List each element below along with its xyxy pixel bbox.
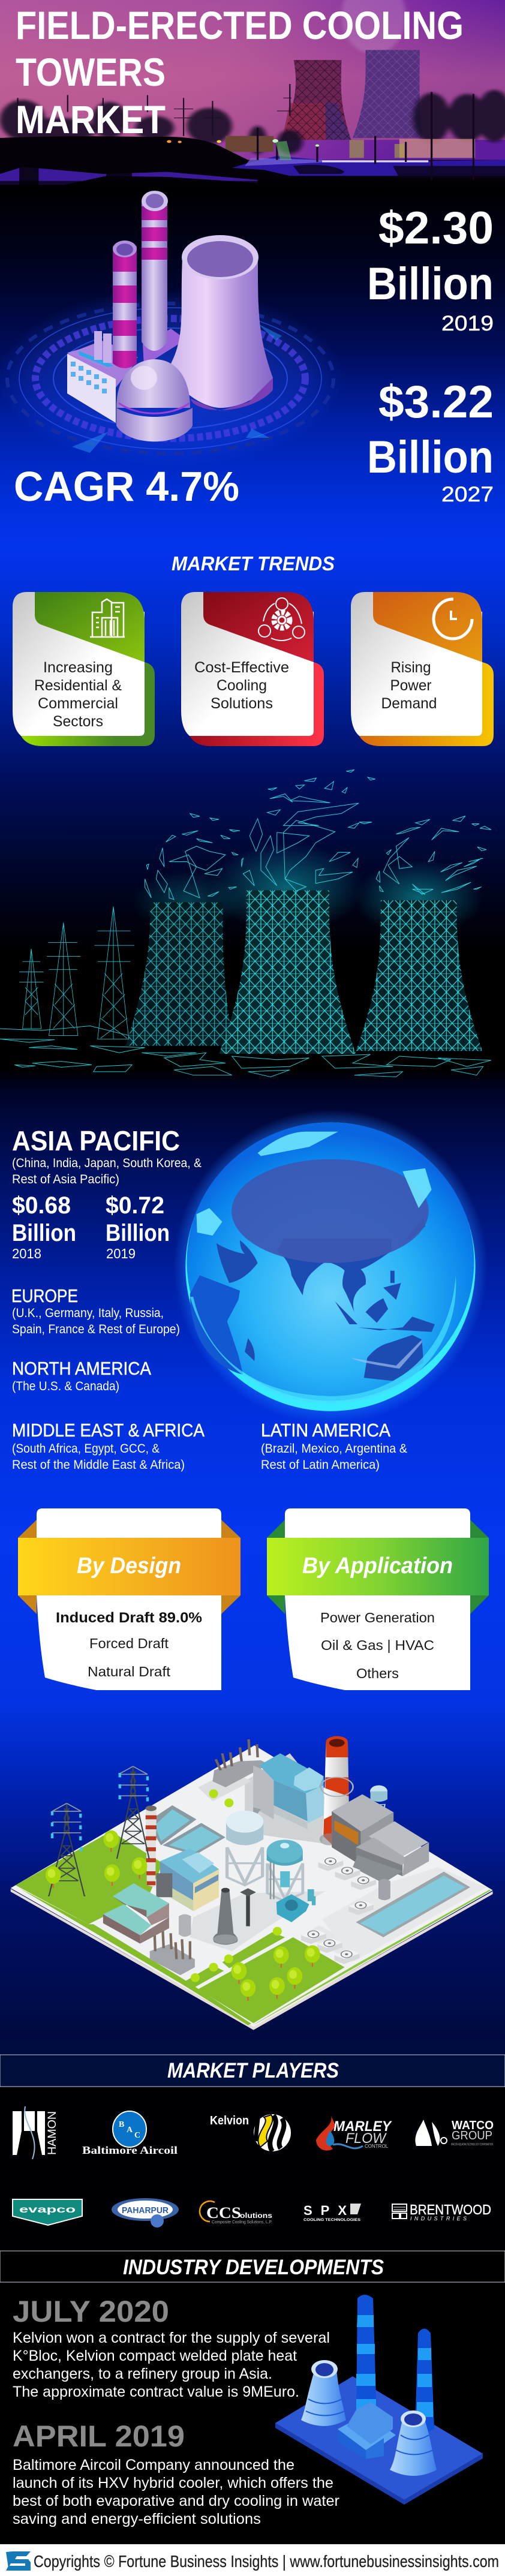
striped tall stack	[146, 1805, 157, 1887]
logo: Marley Flow: FLOW	[345, 2130, 387, 2147]
Asia Pacific values	[12, 1192, 170, 1246]
development: April 2019: APRIL 2019	[13, 2419, 185, 2453]
development: July 2020: K°Bloc, Kelvion compact welded plate heat	[13, 2347, 297, 2364]
development: July 2020	[13, 2295, 330, 2400]
logo: Marley Flow: CONTROL	[365, 2144, 389, 2149]
text: Middle East and Africa	[12, 1420, 205, 1472]
fans	[301, 1857, 376, 1964]
development: July 2020: JULY 2020	[13, 2295, 169, 2328]
logo: SPX	[303, 2203, 361, 2222]
logo: Baltimore Aircoil: B	[119, 2120, 124, 2129]
teal pumps	[276, 1889, 315, 1922]
panel: by design: By Design	[77, 1553, 181, 1579]
panel: rising power demand trend: Power	[390, 677, 432, 694]
development: April 2019: launch of its HXV hybrid cooler, which offers the	[13, 2475, 333, 2491]
smoke fragments	[145, 770, 491, 900]
text: Europe: Spain, France & Rest of Europe)	[12, 1322, 180, 1336]
logo: Baltimore Aircoil	[82, 2111, 178, 2156]
text: North America: NORTH AMERICA	[12, 1358, 151, 1379]
logo: Brentwood: INDUSTRIES	[410, 2216, 467, 2222]
tower right	[354, 900, 483, 1053]
heading: market players: MARKET PLAYERS	[167, 2059, 339, 2082]
hero photo: cooling towers at dusk	[0, 0, 505, 187]
developments header band	[0, 2251, 505, 2282]
text: Asia Pacific	[12, 1125, 202, 1261]
small water tank top right	[370, 1786, 387, 1815]
market size 2027	[367, 377, 494, 506]
panel: rising power demand trend: Rising	[391, 659, 431, 676]
tower left	[122, 901, 235, 1048]
logo: Brentwood	[392, 2202, 491, 2222]
development: April 2019: Baltimore Aircoil Company announced the	[13, 2457, 294, 2473]
logo: CCS Solutions: Composite Cooling Solutions, L.P.	[212, 2220, 272, 2225]
logo: SPX: COOLING TECHNOLOGIES	[303, 2219, 360, 2222]
illustration: blue power plant	[275, 2295, 483, 2505]
text: Latin America	[261, 1420, 407, 1472]
insulators	[52, 1773, 148, 1851]
text: North America	[12, 1358, 151, 1393]
grey office block	[253, 1765, 275, 1819]
icon: Fortune Business Insights logo	[6, 2551, 31, 2571]
red striped chimney	[323, 1742, 349, 1844]
logo: SPX: SPX	[303, 2203, 347, 2218]
development: April 2019: best of both evaporative and dry cooling in water	[13, 2493, 339, 2509]
text: Latin America: LATIN AMERICA	[261, 1420, 390, 1441]
grey industrial block	[332, 1795, 393, 1831]
text: Europe: (U.K., Germany, Italy, Russia,	[12, 1306, 164, 1320]
panel: by design: Induced Draft 89.0%	[56, 1610, 202, 1626]
dark silo group	[156, 1873, 172, 1897]
logo: Hamon	[13, 2106, 59, 2159]
regional section: globe	[173, 1110, 488, 1424]
developments background	[0, 2283, 505, 2544]
market size 2027: Billion	[367, 432, 494, 483]
panel: residential and commercial trend: Residential &	[34, 677, 122, 694]
water tower pale	[226, 1811, 263, 1885]
Asia Pacific values: $0.72	[106, 1192, 164, 1219]
pylons	[19, 906, 134, 1039]
text: Middle East and Africa: Rest of the Middle East & Africa)	[12, 1458, 185, 1472]
dark ribbed stack	[213, 1888, 238, 1944]
market size 2027: 2027	[441, 483, 494, 506]
logo: Baltimore Aircoil: C	[134, 2131, 140, 2140]
market size 2019: 2019	[441, 312, 494, 335]
development: April 2019	[13, 2419, 339, 2527]
logo: Watco Group: GROUP	[452, 2129, 492, 2142]
Asia Pacific values: $0.68	[12, 1192, 71, 1219]
panel: by design: Natural Draft	[88, 1664, 171, 1679]
ground fragments	[0, 1026, 491, 1077]
text: Asia Pacific: 2019	[106, 1246, 136, 1261]
development: July 2020: exchangers, to a refinery group in Asia.	[13, 2365, 272, 2382]
text: Europe	[11, 1285, 180, 1336]
icon: buildings	[90, 599, 125, 637]
panel: residential and commercial trend: Sectors	[53, 713, 103, 730]
logo: Hamon: HAMON	[46, 2111, 59, 2155]
light post	[240, 1888, 256, 1926]
logo: Kelvion	[210, 2114, 291, 2151]
text: Asia Pacific: Rest of Asia Pacific)	[12, 1173, 119, 1186]
hero illustration: plant on glowing rings	[0, 191, 344, 468]
panel: residential and commercial trend: Commercial	[38, 695, 118, 712]
logo: Watco Group	[415, 2119, 494, 2147]
Asia Pacific values: Billion	[12, 1220, 76, 1246]
text: North America: (The U.S. & Canada)	[12, 1379, 119, 1393]
icon: money gear cycle	[258, 598, 305, 641]
pools	[146, 1805, 197, 1845]
text: Asia Pacific: (China, India, Japan, South Korea, &	[12, 1156, 202, 1170]
logo: Brentwood: BRENTWOOD	[410, 2202, 491, 2217]
continents	[217, 1218, 435, 1381]
isometric power plant	[11, 1736, 493, 2030]
logo: Watco Group: WATCO	[452, 2119, 494, 2132]
text: Latin America: (Brazil, Mexico, Argentina &	[261, 1442, 407, 1456]
panel: rising power demand trend: Demand	[381, 695, 437, 712]
market size 2027: $3.22	[378, 377, 494, 428]
CAGR: CAGR 4.7%	[14, 463, 239, 510]
panel: residential and commercial trend	[13, 592, 155, 746]
panel: by design	[18, 1508, 241, 1690]
development: July 2020: The approximate contract value is 9MEuro.	[13, 2383, 299, 2400]
grey silo lower	[179, 1914, 191, 1937]
logo: Paharpur: PAHARPUR	[122, 2205, 169, 2216]
blue office building	[259, 1753, 324, 1793]
heading: industry developments: INDUSTRY DEVELOPMENTS	[123, 2256, 384, 2279]
logo: Marley Flow	[316, 2116, 392, 2151]
logo: CCS Solutions: olutions	[240, 2211, 272, 2220]
logo: Evapco	[13, 2199, 82, 2225]
panel: rising power demand trend	[351, 592, 494, 746]
players and developments background	[0, 2087, 505, 2251]
development: April 2019: saving and energy-efficient solutions	[13, 2511, 261, 2527]
trees	[46, 1830, 320, 2001]
mid office building	[160, 1848, 219, 1911]
text: Latin America: Rest of Latin America)	[261, 1458, 380, 1472]
logo: Baltimore Aircoil: A	[127, 2126, 133, 2135]
title	[16, 3, 464, 142]
text: Middle East and Africa: MIDDLE EAST & AFRICA	[12, 1420, 205, 1441]
panel: residential and commercial trend: Increasing	[43, 659, 113, 676]
panel: by application	[267, 1508, 489, 1690]
logo: Paharpur	[112, 2198, 179, 2228]
panel: by application: Oil & Gas | HVAC	[321, 1637, 434, 1653]
logo: Evapco: evapco	[19, 2205, 76, 2215]
panel: cost-effective trend	[181, 592, 324, 746]
pylons	[48, 1766, 149, 1896]
footer	[0, 2544, 505, 2576]
wireframe cooling towers and pylons	[0, 770, 491, 1077]
panel: by application: Others	[356, 1666, 399, 1681]
market size 2019: $2.30	[378, 203, 494, 254]
development: July 2020: Kelvion won a contract for the supply of several	[13, 2329, 330, 2346]
icon: clock	[434, 599, 472, 639]
shrubs	[191, 1789, 282, 1982]
panel: cost-effective trend: Solutions	[211, 695, 273, 712]
market size 2019: Billion	[367, 258, 494, 309]
logo: Baltimore Aircoil: Baltimore Aircoil	[82, 2144, 178, 2156]
water tower teal	[267, 1839, 303, 1901]
panel: cost-effective trend: Cost-Effective	[194, 659, 289, 676]
tower centre	[217, 889, 357, 1054]
text: Europe: EUROPE	[11, 1285, 78, 1306]
text: Asia Pacific: 2018	[12, 1246, 41, 1261]
title: TOWERS	[16, 50, 166, 94]
panel: by application: Power Generation	[320, 1610, 435, 1625]
text: Asia Pacific: ASIA PACIFIC	[12, 1125, 180, 1156]
market players band	[0, 2055, 505, 2087]
Asia Pacific values: Billion	[106, 1220, 170, 1246]
logo: CCS Solutions	[200, 2201, 272, 2225]
title: MARKET	[16, 97, 166, 142]
grey silo right	[378, 1878, 390, 1900]
text: Middle East and Africa: (South Africa, Egypt, GCC, &	[12, 1442, 160, 1456]
transformers	[212, 1739, 269, 1787]
logo: Kelvion: Kelvion	[210, 2114, 249, 2127]
logo: CCS Solutions: CCS	[206, 2204, 241, 2222]
heading: market trends: MARKET TRENDS	[172, 552, 335, 575]
market size 2019	[367, 203, 494, 335]
logo: Marley Flow: MARLEY	[333, 2118, 392, 2135]
panel: cost-effective trend: Cooling	[217, 677, 267, 694]
panel: by design: Forced Draft	[89, 1636, 169, 1651]
panel: by application: By Application	[302, 1553, 453, 1579]
low teal roof building	[103, 1883, 169, 1944]
